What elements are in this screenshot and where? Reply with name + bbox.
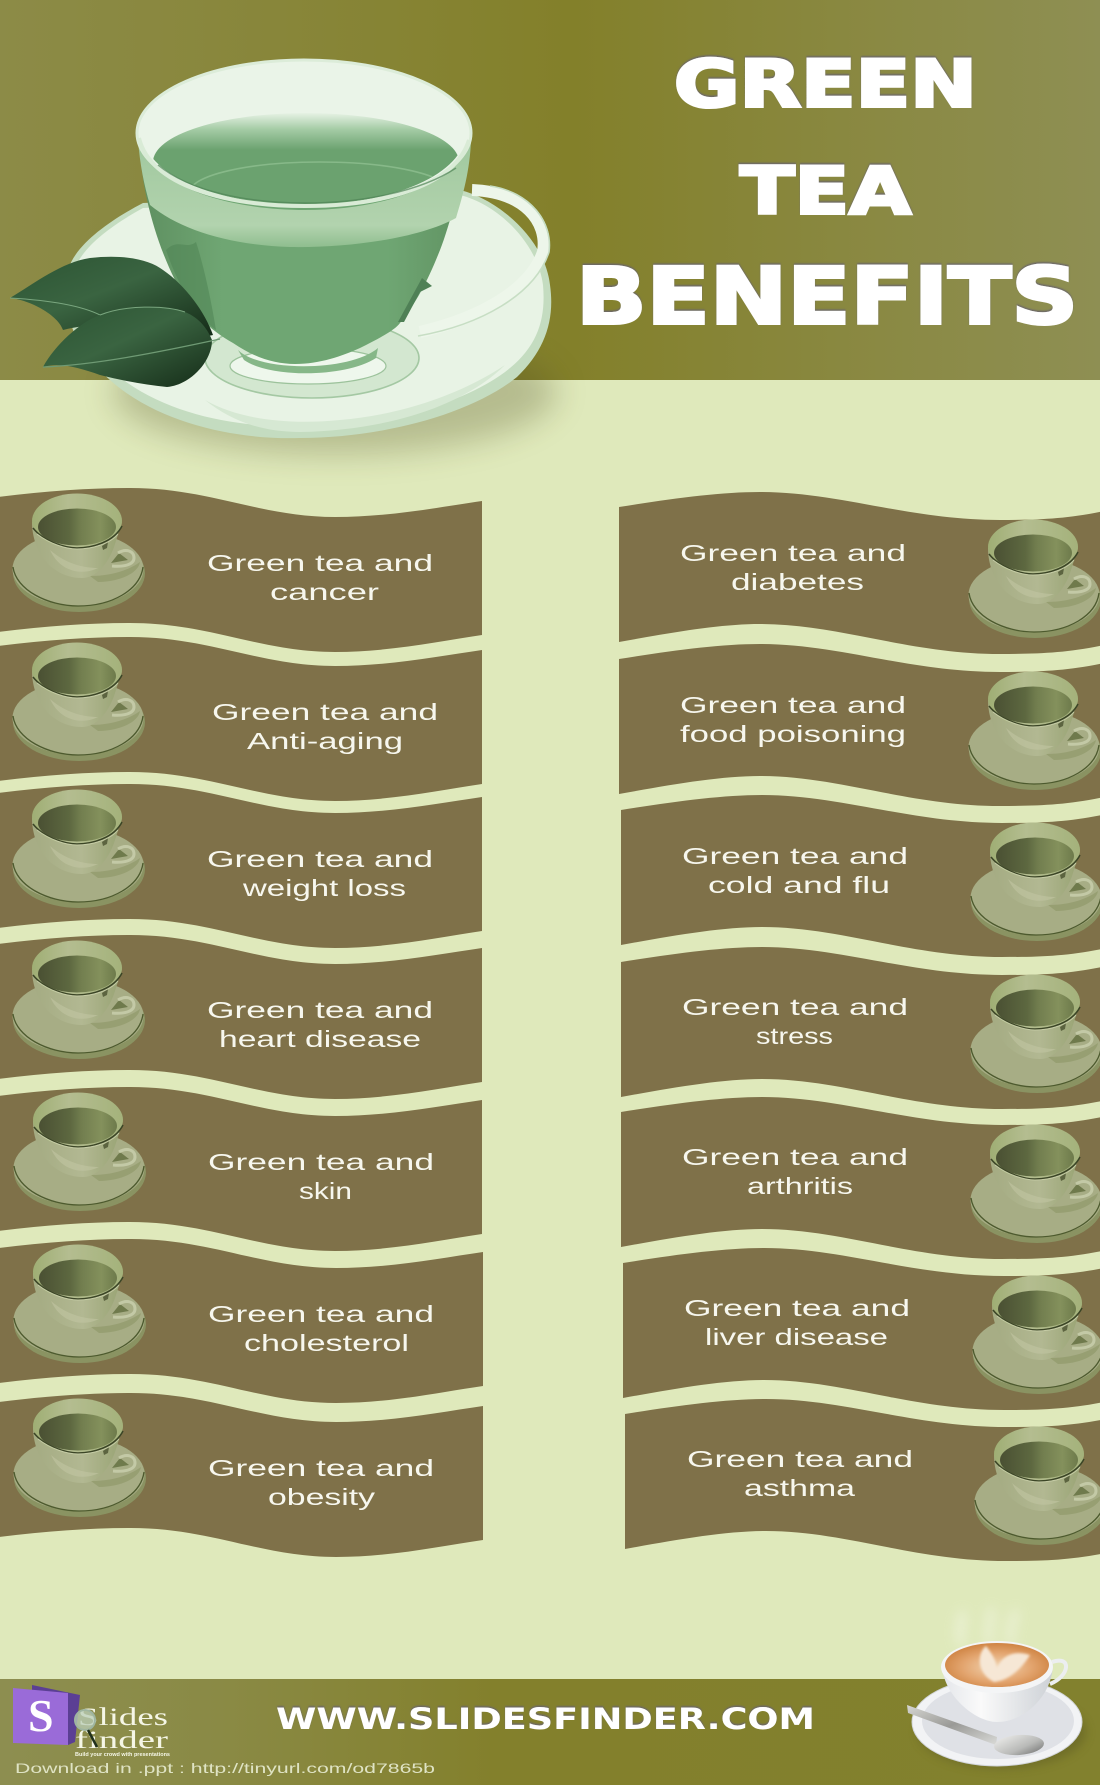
label: Green tea and: [682, 994, 908, 1020]
glass rim: [137, 60, 471, 206]
saucer: [66, 190, 551, 438]
glass reflection at cup bottom: [398, 278, 432, 322]
saucer shadow: [918, 1696, 1086, 1768]
label: food poisoning: [680, 721, 906, 747]
label: Green tea and: [208, 1149, 434, 1175]
label: [208, 1149, 434, 1204]
icon: purple book: S: [28, 1690, 54, 1741]
label: [207, 997, 433, 1052]
label: arthritis: [747, 1173, 853, 1199]
label: [207, 550, 433, 605]
label: [682, 1144, 908, 1199]
banner: [621, 1097, 1100, 1259]
footer band: [0, 1679, 1100, 1785]
logo wordmark: Build your crowd with presentations: [75, 1752, 170, 1758]
banner: [0, 935, 482, 1099]
label: [208, 1301, 434, 1356]
label: [687, 1446, 913, 1501]
banner: [621, 795, 1100, 957]
label: skin: [299, 1178, 352, 1204]
title line: TEA: TEA: [740, 154, 911, 230]
rim front edge: [139, 138, 469, 206]
logo wordmark: Slides: [78, 1704, 168, 1731]
panel: skin: [0, 1087, 482, 1251]
title: [576, 48, 1078, 342]
illustration: coffee cup on saucer with spoon: [907, 1608, 1086, 1768]
logo wordmark: finder: [75, 1727, 169, 1754]
saucer shadow: [113, 330, 557, 454]
panel: diabetes: [619, 492, 1100, 654]
label: Green tea and: [687, 1446, 913, 1472]
banner: [619, 492, 1100, 654]
label: [682, 994, 908, 1049]
panel: obesity: [0, 1393, 483, 1557]
label: cancer: [270, 579, 380, 605]
icon: teacup: [12, 940, 145, 1059]
label: Anti-aging: [247, 728, 403, 754]
leaf front: [43, 307, 220, 387]
label: [207, 846, 433, 901]
label: [208, 1455, 434, 1510]
banner: [0, 1239, 483, 1403]
panel: weight loss: [0, 784, 482, 948]
title line: BENEFITS: BENEFITS: [576, 252, 1078, 342]
cup foot: [205, 318, 419, 398]
banner: [0, 637, 482, 801]
icon: teacup: [974, 1426, 1100, 1545]
title line: GREEN: GREEN: [674, 48, 977, 122]
cup body with tea: [140, 150, 470, 364]
icon: teacup: [970, 822, 1100, 941]
icon: teacup: [968, 672, 1100, 790]
icon: teacup: [972, 1276, 1100, 1394]
label: [212, 699, 438, 754]
icon: teacup: [970, 1124, 1100, 1243]
label: Green tea and: [680, 692, 906, 718]
label: Green tea and: [207, 997, 433, 1023]
coffee with latte art: [945, 1643, 1049, 1687]
label: Green tea and: [684, 1295, 910, 1321]
frosted band: [138, 140, 471, 247]
banner: [0, 1087, 482, 1251]
label: diabetes: [731, 569, 864, 595]
label: [680, 540, 906, 595]
spoon: [907, 1705, 1045, 1757]
label: Green tea and: [207, 846, 433, 872]
panel: heart disease: [0, 935, 482, 1099]
label: Green tea and: [212, 699, 438, 725]
panel: cold and flu: [621, 795, 1100, 957]
label: Green tea and: [682, 843, 908, 869]
saucer: [912, 1678, 1082, 1766]
panel: stress: [621, 947, 1100, 1109]
label: Green tea and: [208, 1455, 434, 1481]
panel: food poisoning: [619, 644, 1100, 806]
banner: [625, 1399, 1100, 1561]
label: asthma: [744, 1475, 855, 1501]
panel: asthma: [625, 1399, 1100, 1561]
label: liver disease: [705, 1324, 888, 1350]
glass handle: [418, 186, 549, 336]
tea surface: [153, 114, 458, 204]
label: heart disease: [219, 1026, 421, 1052]
download link: Download in .ppt : http://tinyurl.com/od7865b: [15, 1760, 435, 1776]
label: Green tea and: [680, 540, 906, 566]
leaf back: [10, 257, 213, 336]
banner: [623, 1248, 1100, 1410]
panel: liver disease: [623, 1248, 1100, 1410]
steam: [960, 1608, 1015, 1645]
banner: [0, 784, 482, 948]
icon: purple book: [13, 1685, 80, 1745]
icon: magnifier: [75, 1710, 97, 1747]
cup body: [942, 1665, 1053, 1722]
label: Green tea and: [208, 1301, 434, 1327]
label: [682, 843, 908, 898]
label: Green tea and: [682, 1144, 908, 1170]
icon: teacup: [14, 1092, 146, 1211]
icon: teacup: [968, 520, 1100, 638]
panel: arthritis: [621, 1097, 1100, 1259]
website url: WWW.SLIDESFINDER.COM: [276, 1702, 815, 1736]
label: Green tea and: [207, 550, 433, 576]
header band: [0, 0, 1100, 380]
icon: teacup: [970, 974, 1100, 1093]
panel: cancer: [0, 488, 482, 652]
hero illustration: glass cup of green tea on saucer with leaves: [10, 60, 557, 454]
icon: teacup: [14, 1244, 146, 1363]
logo wordmark: [75, 1704, 170, 1758]
label: stress: [756, 1023, 833, 1049]
logo: Slides Finder: [13, 1685, 170, 1758]
panel: cholesterol: [0, 1239, 483, 1403]
banner: [0, 1393, 483, 1557]
cup handle: [1050, 1661, 1066, 1684]
label: weight loss: [242, 875, 406, 901]
label: cold and flu: [708, 872, 890, 898]
icon: teacup: [12, 494, 145, 612]
banner: [621, 947, 1100, 1109]
label: [684, 1295, 910, 1350]
label: cholesterol: [244, 1330, 409, 1356]
banner: [0, 488, 482, 652]
panel: anti-aging: [0, 637, 482, 801]
cup rim: [941, 1641, 1053, 1693]
icon: teacup: [14, 1398, 146, 1517]
label: [680, 692, 906, 747]
icon: teacup: [12, 790, 145, 908]
icon: teacup: [12, 642, 145, 761]
label: obesity: [268, 1484, 376, 1510]
banner: [619, 644, 1100, 806]
glass reflection stripe: [166, 242, 216, 330]
